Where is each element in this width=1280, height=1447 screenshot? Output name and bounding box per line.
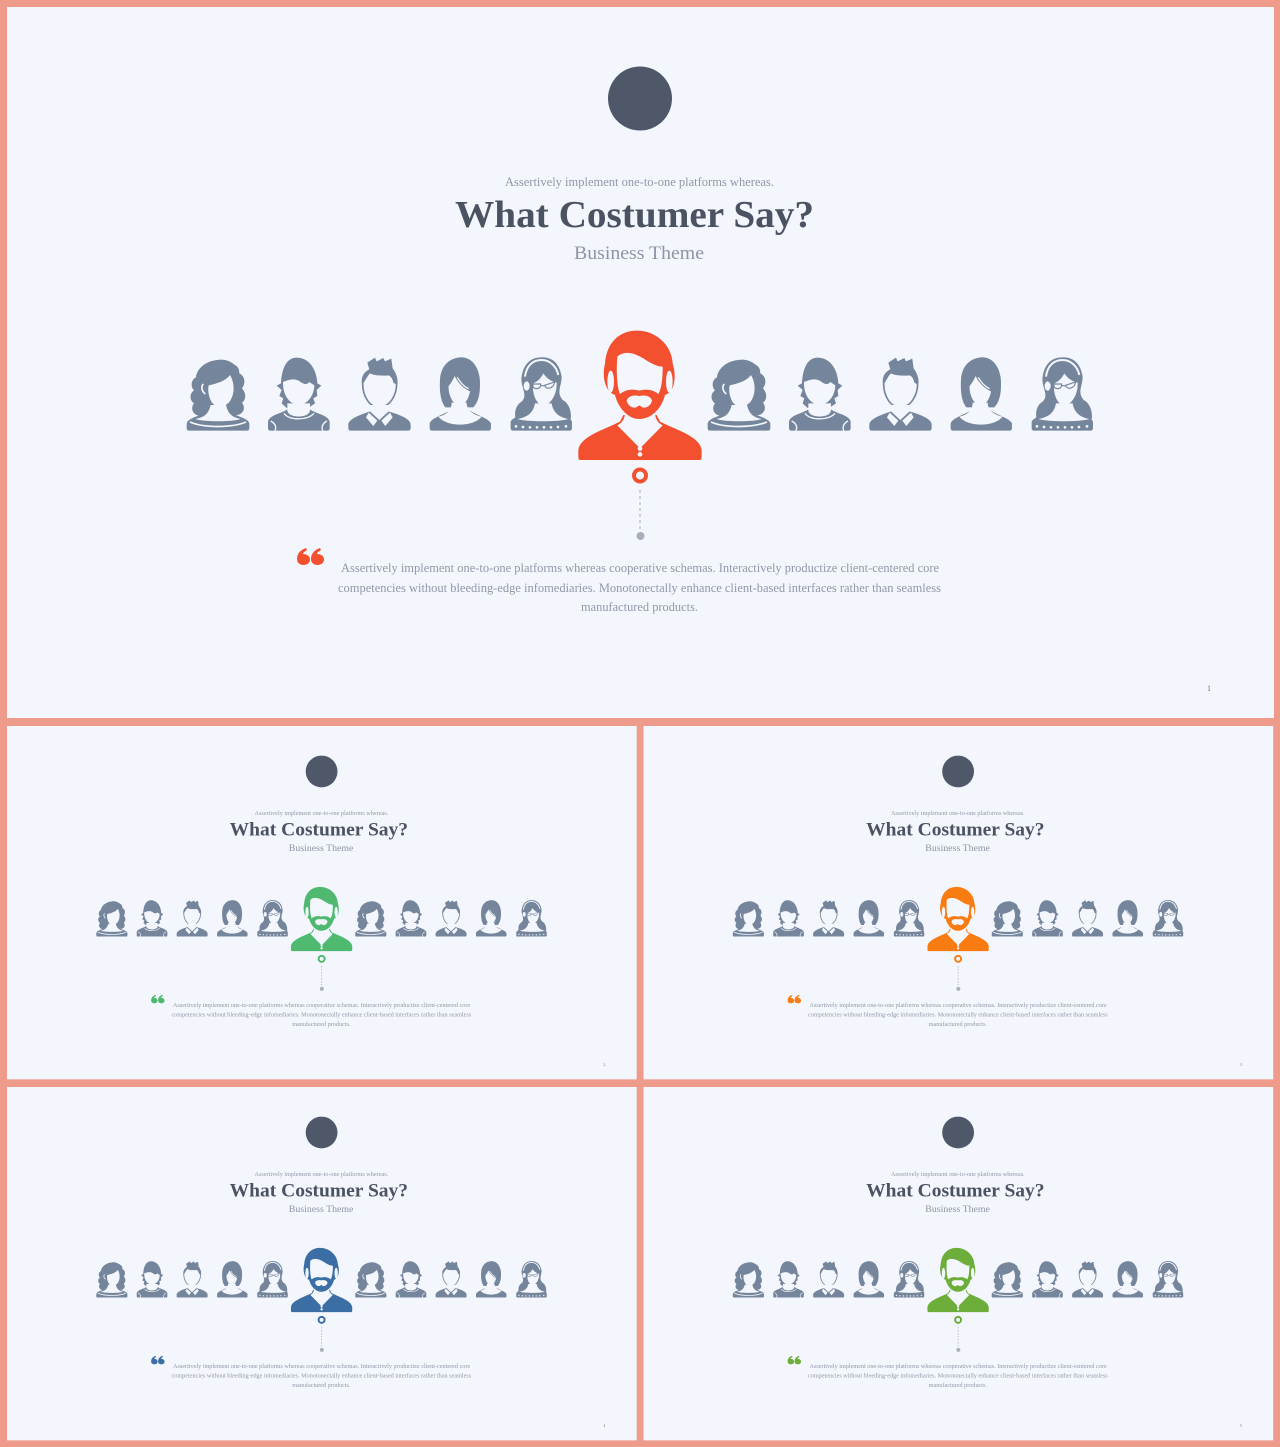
quote paragraph: competencies without bleeding-edge infomediaries. Monotonectally enhance client-based interfaces rather than seamless <box>172 1373 472 1380</box>
subtitle: Business Theme <box>289 1205 353 1215</box>
kicker text: Assertively implement one-to-one platforms whereas. <box>505 175 774 189</box>
connector: ring and dashed line <box>955 956 961 991</box>
title: What Costumer Say? <box>455 194 814 236</box>
quote paragraph: manufactured products. <box>581 600 698 614</box>
page number: 3 <box>1240 1062 1242 1067</box>
avatar row <box>187 331 1093 460</box>
icon: quote mark <box>151 1356 165 1364</box>
quote paragraph: manufactured products. <box>929 1021 987 1028</box>
subtitle: Business Theme <box>574 243 704 264</box>
panel: lime green variant slide <box>644 1087 1273 1440</box>
icon: dark circle <box>306 756 338 787</box>
quote paragraph <box>808 1363 1108 1389</box>
icon: quote mark <box>788 1356 801 1364</box>
avatar: man with collar right <box>869 358 932 431</box>
icon: dark circle <box>942 756 974 787</box>
connector: ring and dashed line <box>955 1317 961 1352</box>
subtitle: Business Theme <box>289 844 353 854</box>
avatar: woman with glasses right <box>1032 357 1093 431</box>
avatar row <box>96 1248 547 1312</box>
avatar: bob hair woman right <box>951 357 1012 431</box>
avatar: highlighted bearded man <box>578 331 702 460</box>
quote paragraph: Assertively implement one-to-one platforms whereas cooperative schemas. Interactively productize client-centered core <box>809 1002 1107 1009</box>
connector: ring and dashed line <box>319 956 325 991</box>
quote paragraph: Assertively implement one-to-one platforms whereas cooperative schemas. Interactively productize client-centered core <box>173 1002 470 1009</box>
quote paragraph: competencies without bleeding-edge infomediaries. Monotonectally enhance client-based interfaces rather than seamless <box>808 1012 1108 1019</box>
title: What Costumer Say? <box>230 1180 408 1201</box>
page number: 1 <box>1207 684 1211 693</box>
avatar: woman with glasses <box>511 357 572 431</box>
quote paragraph: manufactured products. <box>292 1382 351 1389</box>
title: What Costumer Say? <box>866 819 1045 840</box>
title: What Costumer Say? <box>866 1180 1045 1201</box>
quote paragraph <box>172 1363 472 1389</box>
quote paragraph <box>808 1002 1108 1028</box>
title: What Costumer Say? <box>230 819 408 840</box>
quote paragraph <box>172 1002 472 1028</box>
quote paragraph: Assertively implement one-to-one platforms whereas cooperative schemas. Interactively productize client-centered core <box>341 561 939 575</box>
kicker text: Assertively implement one-to-one platforms whereas. <box>891 810 1025 817</box>
kicker text: Assertively implement one-to-one platforms whereas. <box>255 810 389 817</box>
subtitle: Business Theme <box>925 1205 990 1215</box>
panel: blue variant slide <box>7 1087 637 1440</box>
quote paragraph: manufactured products. <box>292 1021 351 1028</box>
kicker text: Assertively implement one-to-one platforms whereas. <box>255 1171 389 1178</box>
quote paragraph: Assertively implement one-to-one platforms whereas cooperative schemas. Interactively productize client-centered core <box>809 1363 1107 1370</box>
avatar: short hair woman right <box>789 358 851 431</box>
panel: main slide <box>7 7 1274 718</box>
panel: orange variant slide <box>644 726 1273 1079</box>
icon: dark circle <box>306 1117 338 1148</box>
kicker text: Assertively implement one-to-one platforms whereas. <box>891 1171 1025 1178</box>
page number: 4 <box>603 1423 605 1428</box>
avatar row <box>733 887 1183 951</box>
avatar row <box>733 1248 1183 1312</box>
avatar: bob hair woman <box>430 357 491 431</box>
avatar row <box>96 887 547 951</box>
connector: ring and dashed line <box>634 470 646 540</box>
icon: quote mark <box>151 995 165 1003</box>
avatar: wavy hair woman <box>187 360 249 431</box>
icon: dark circle <box>942 1117 974 1148</box>
quote paragraph <box>338 561 941 614</box>
avatar: man with collar <box>348 358 411 431</box>
icon: quote mark <box>788 995 801 1003</box>
quote paragraph: competencies without bleeding-edge infomediaries. Monotonectally enhance client-based interfaces rather than seamless <box>338 581 941 595</box>
quote paragraph: manufactured products. <box>929 1382 987 1389</box>
quote paragraph: competencies without bleeding-edge infomediaries. Monotonectally enhance client-based interfaces rather than seamless <box>808 1373 1108 1380</box>
panel: green variant slide <box>7 726 637 1079</box>
quote paragraph: Assertively implement one-to-one platforms whereas cooperative schemas. Interactively productize client-centered core <box>173 1363 470 1370</box>
avatar: short hair woman <box>268 358 330 431</box>
avatar: wavy hair woman right <box>708 360 770 431</box>
page number: 5 <box>1240 1423 1242 1428</box>
connector: ring and dashed line <box>319 1317 325 1352</box>
subtitle: Business Theme <box>925 844 990 854</box>
page number: 2 <box>603 1062 605 1067</box>
icon: quote mark <box>297 548 324 565</box>
quote paragraph: competencies without bleeding-edge infomediaries. Monotonectally enhance client-based interfaces rather than seamless <box>172 1012 472 1019</box>
icon: dark circle <box>608 66 672 130</box>
